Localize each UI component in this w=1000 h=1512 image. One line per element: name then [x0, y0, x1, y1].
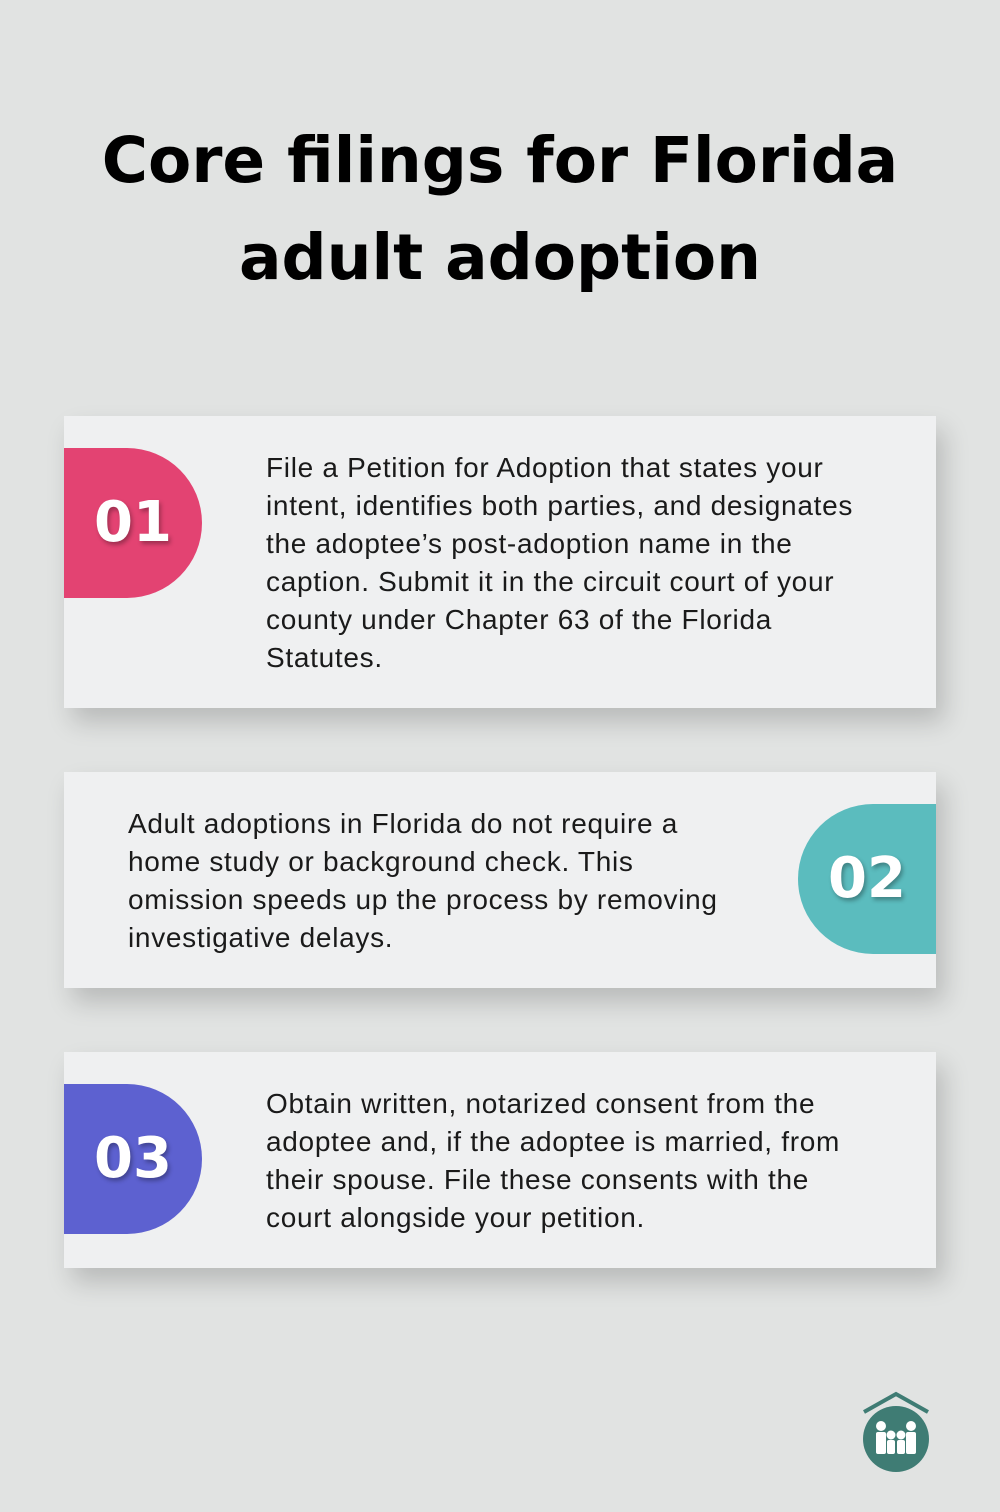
panel: step 1	[64, 416, 936, 708]
text step 1: the adoptee’s post-adoption name in the	[266, 528, 792, 559]
panel: step 3	[64, 1052, 936, 1268]
text step 3: adoptee and, if the adoptee is married, from	[266, 1126, 840, 1157]
text step 3: court alongside your petition.	[266, 1202, 645, 1233]
badge 01	[64, 448, 202, 598]
text step 2: Adult adoptions in Florida do not require a	[128, 808, 678, 839]
panel: step 2	[64, 772, 936, 988]
badge 02	[798, 804, 936, 954]
badge 02: 02	[828, 846, 906, 911]
text step 3: Obtain written, notarized consent from the	[266, 1088, 815, 1119]
badge 01: 01	[94, 490, 172, 555]
text step 3	[266, 1088, 840, 1233]
text step 1: intent, identifies both parties, and designates	[266, 490, 853, 521]
text step 2: home study or background check. This	[128, 846, 634, 877]
icon: logo	[863, 1392, 929, 1472]
badge 03: 03	[94, 1126, 172, 1191]
title: adult adoption	[239, 221, 761, 294]
title	[102, 124, 898, 294]
text step 1	[266, 452, 853, 673]
text step 1: county under Chapter 63 of the Florida	[266, 604, 772, 635]
text step 1: caption. Submit it in the circuit court of your	[266, 566, 834, 597]
title: Core filings for Florida	[102, 124, 898, 197]
text step 1: Statutes.	[266, 642, 383, 673]
badge 03	[64, 1084, 202, 1234]
text step 3: their spouse. File these consents with the	[266, 1164, 809, 1195]
text step 2: investigative delays.	[128, 922, 393, 953]
text step 2: omission speeds up the process by removing	[128, 884, 718, 915]
text step 2	[128, 808, 718, 953]
text step 1: File a Petition for Adoption that states your	[266, 452, 824, 483]
